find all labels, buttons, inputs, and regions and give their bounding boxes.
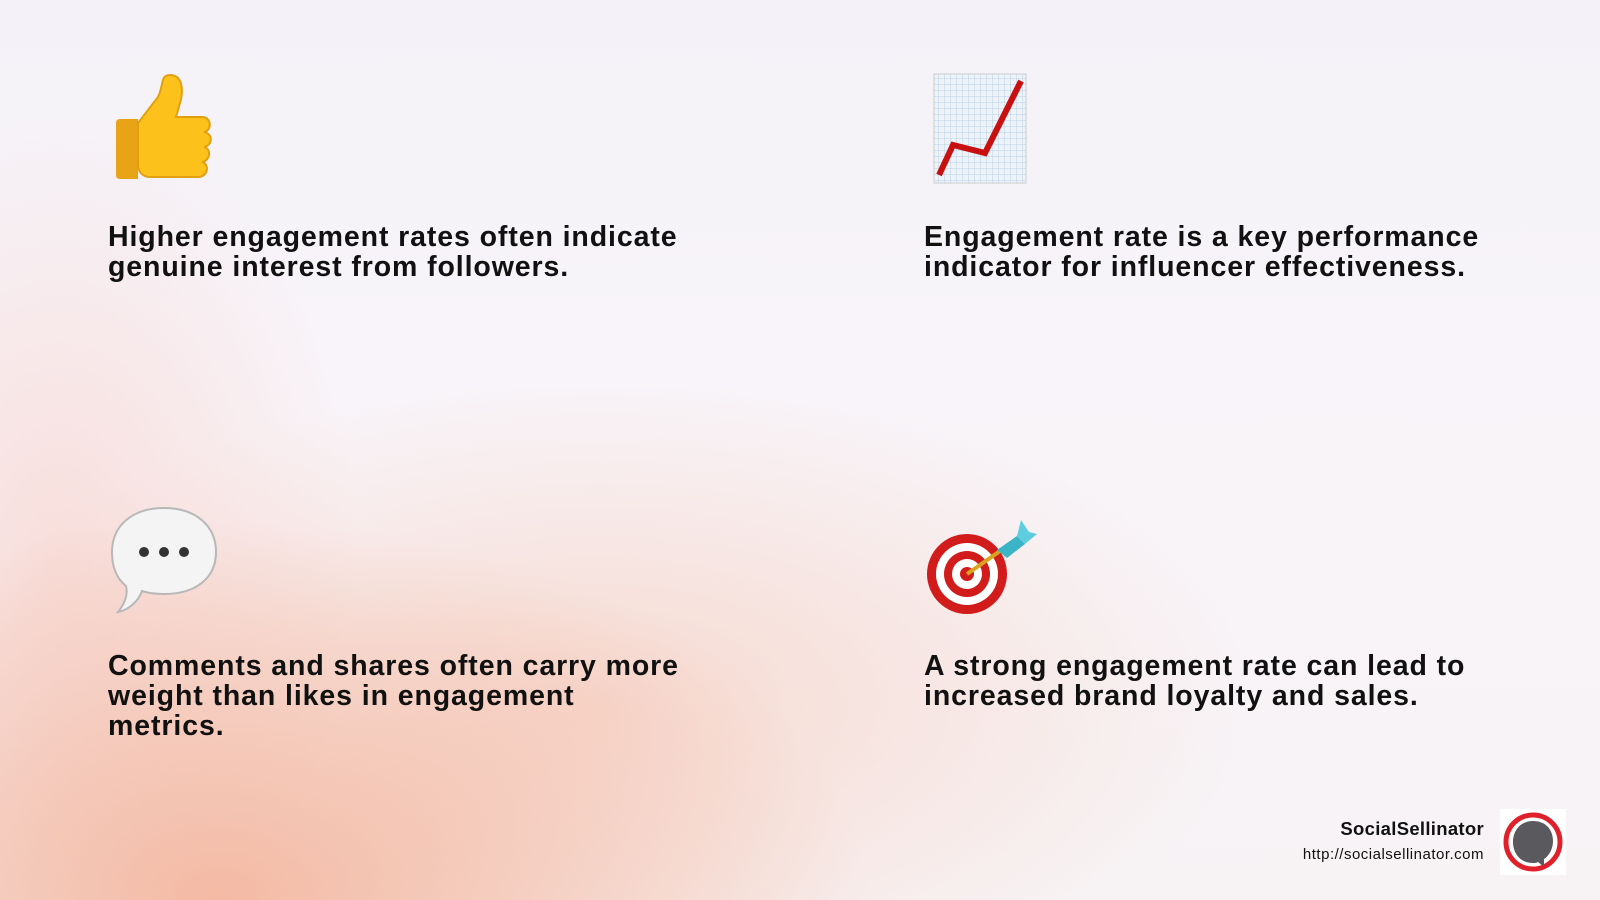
text: comments and shares: metrics. — [108, 710, 225, 742]
icon: speech bubble — [111, 507, 217, 614]
text: brand loyalty: increased brand loyalty and sales. — [924, 680, 1419, 712]
text: engagement genuine interest — [108, 221, 677, 283]
icon: thumbs up — [116, 74, 212, 179]
text: brand loyalty — [924, 650, 1465, 712]
text: engagement genuine interest: Higher engagement rates often indicate — [108, 221, 677, 253]
text: comments and shares — [108, 650, 679, 742]
brand url: http://socialsellinator.com — [1303, 846, 1484, 863]
text: key performance indicator: Engagement rate is a key performance — [924, 221, 1479, 253]
icon: chart increasing — [934, 74, 1026, 184]
text: comments and shares: Comments and shares often carry more — [108, 650, 679, 682]
text: engagement genuine interest: genuine interest from followers. — [108, 251, 569, 283]
brand name: SocialSellinator — [1340, 818, 1484, 839]
text: key performance indicator — [924, 221, 1479, 283]
text: comments and shares: weight than likes in engagement — [108, 680, 575, 712]
text: brand loyalty: A strong engagement rate can lead to — [924, 650, 1465, 682]
text: key performance indicator: indicator for influencer effectiveness. — [924, 251, 1466, 283]
logo — [1500, 809, 1566, 875]
icon: target with dart — [927, 520, 1037, 614]
